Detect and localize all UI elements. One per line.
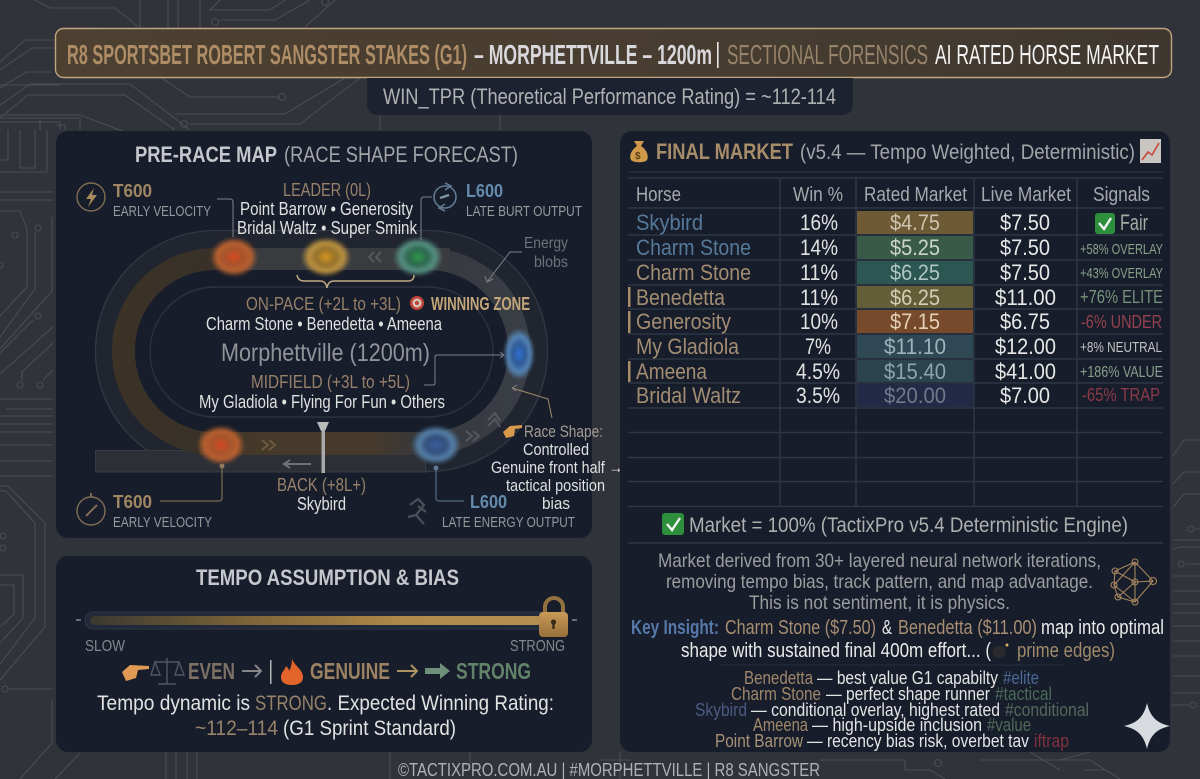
table header row: Horse bbox=[636, 184, 681, 206]
table: market bbox=[628, 172, 1163, 506]
key insight: & bbox=[882, 617, 892, 639]
row: Generosity: -6% UNDER bbox=[1081, 312, 1162, 332]
row: Generosity: $7.15 bbox=[890, 309, 940, 334]
key insight bbox=[631, 617, 1164, 662]
methodology paragraph: Market derived from 30+ layered neural network iterations, bbox=[658, 550, 1101, 572]
midfield label: My Gladiola • Flying For Fun • Others bbox=[199, 392, 445, 412]
row: Benedetta: $6.25 bbox=[890, 285, 940, 310]
icon: sparkle star bbox=[1124, 703, 1170, 749]
energy blobs label: Energy bbox=[524, 235, 568, 252]
tempo summary: ~112–114 bbox=[195, 717, 278, 740]
row: Benedetta bbox=[628, 285, 1163, 310]
horse notes: Benedetta bbox=[744, 668, 814, 688]
icon: chart bbox=[1140, 139, 1161, 163]
horse notes: Charm Stone bbox=[731, 684, 821, 704]
row: Skybird: 16% bbox=[800, 210, 838, 235]
key insight: Benedetta ($11.00) bbox=[898, 617, 1037, 639]
race shape note: bias bbox=[542, 494, 570, 513]
market total line: Market = 100% (TactixPro v5.4 Deterministic Engine) bbox=[689, 514, 1128, 537]
tempo heading: TEMPO ASSUMPTION & BIAS bbox=[196, 565, 459, 590]
key insight: prime edges) bbox=[1017, 640, 1115, 662]
row: Generosity: $6.75 bbox=[1000, 309, 1050, 334]
slider labels bbox=[85, 638, 565, 655]
row: Skybird: $4.75 bbox=[890, 210, 940, 235]
final market heading: (v5.4 — Tempo Weighted, Deterministic) bbox=[800, 141, 1135, 164]
table header row: Rated Market bbox=[864, 184, 967, 206]
title: separator bbox=[717, 42, 719, 68]
pre-race map heading bbox=[135, 142, 518, 167]
icon: fire bbox=[281, 658, 303, 685]
row: Charm Stone 11%: $7.50 bbox=[1000, 260, 1050, 285]
title: sectional forensics: SECTIONAL FORENSICS bbox=[727, 39, 928, 70]
horse notes: #conditional bbox=[1005, 700, 1089, 720]
rated market cell colours bbox=[857, 211, 973, 407]
row: Charm Stone 14%: $7.50 bbox=[1000, 235, 1050, 260]
on-pace label bbox=[206, 294, 530, 334]
final market heading: FINAL MARKET bbox=[656, 139, 793, 164]
icon: money bag: $ bbox=[635, 151, 641, 162]
pre-race map heading: PRE-RACE MAP bbox=[135, 142, 277, 167]
row: Benedetta: Benedetta bbox=[636, 285, 726, 310]
start post marker bbox=[317, 422, 329, 473]
track name: Morphettville (1200m) bbox=[221, 339, 430, 367]
horse notes: — conditional overlay, highest rated bbox=[751, 700, 1000, 720]
row: My Gladiola: 7% bbox=[805, 334, 831, 359]
race shape note: tactical position bbox=[506, 476, 605, 495]
leader label bbox=[237, 180, 418, 238]
icon: L600 bottom runner bbox=[408, 499, 426, 524]
row: Bridal Waltz: $20.00 bbox=[884, 383, 946, 408]
key insight: Charm Stone ($7.50) bbox=[725, 617, 876, 639]
row: My Gladiola: $12.00 bbox=[995, 334, 1056, 359]
row: Charm Stone 14%: +58% OVERLAY bbox=[1080, 241, 1163, 258]
tempo summary: (G1 Sprint Standard) bbox=[283, 717, 456, 740]
table header row: Signals bbox=[1093, 184, 1150, 206]
icon: T600 bottom stopwatch bbox=[77, 493, 105, 525]
row: Charm Stone 11% bbox=[636, 260, 1163, 285]
race shape note: Genuine front half → bbox=[491, 458, 623, 477]
row: My Gladiola: +8% NEUTRAL bbox=[1080, 339, 1162, 356]
connector lines bbox=[160, 197, 552, 501]
icon: L600 top cycle bbox=[434, 183, 456, 211]
energy blobs label: blobs bbox=[534, 254, 568, 271]
leader label: Point Barrow • Generosity bbox=[240, 199, 413, 219]
row: Skybird: Fair bbox=[1120, 210, 1148, 235]
row: Generosity bbox=[628, 309, 1162, 334]
icon: bomb bbox=[992, 644, 1008, 658]
icon: green arrow bbox=[425, 663, 450, 679]
tempo summary: Tempo dynamic is bbox=[97, 692, 250, 715]
horse notes: — high-upside inclusion bbox=[812, 715, 982, 735]
row: Ameena bbox=[628, 359, 1163, 384]
tempo summary: STRONG bbox=[255, 692, 327, 715]
T600 top label: EARLY VELOCITY bbox=[113, 203, 211, 220]
icon: pointing hand bbox=[122, 665, 149, 681]
methodology paragraph: This is not sentiment, it is physics. bbox=[749, 592, 1010, 614]
energy blobs label bbox=[524, 235, 568, 271]
row: Generosity: 10% bbox=[800, 309, 838, 334]
title: race name: R8 SPORTSBET ROBERT SANGSTER STAKES (G1) bbox=[67, 39, 467, 70]
track chevrons bbox=[262, 252, 500, 468]
methodology paragraph bbox=[658, 550, 1101, 614]
row: Bridal Waltz: 3.5% bbox=[796, 383, 840, 408]
icon: T600 top lightning bbox=[77, 183, 105, 211]
T600 bottom label: T600 bbox=[113, 492, 152, 512]
T600 top label: T600 bbox=[113, 181, 152, 201]
row: Charm Stone 11%: 11% bbox=[800, 260, 838, 285]
row: Generosity: Generosity bbox=[636, 309, 731, 334]
arrow: genuine to strong bbox=[397, 665, 417, 677]
icon: pointing hand bbox=[503, 425, 522, 438]
race shape note: Race Shape: bbox=[524, 422, 603, 441]
race shape note: Controlled bbox=[523, 440, 589, 459]
row: Charm Stone 11%: Charm Stone bbox=[636, 260, 751, 285]
header banner bbox=[56, 28, 1172, 78]
panel: pre-race map bbox=[56, 131, 623, 538]
row: Charm Stone 14%: 14% bbox=[800, 235, 838, 260]
L600 bottom label bbox=[442, 492, 575, 531]
tempo progression: EVEN bbox=[188, 658, 235, 684]
L600 top label: LATE BURT OUTPUT bbox=[466, 203, 582, 220]
row: Charm Stone 11%: +43% OVERLAY bbox=[1080, 265, 1163, 282]
row: Benedetta: 11% bbox=[800, 285, 838, 310]
slider labels: STRONG bbox=[510, 638, 565, 655]
key insight: map into optimal bbox=[1041, 617, 1164, 639]
row: Bridal Waltz: Bridal Waltz bbox=[636, 383, 741, 408]
table header row: Live Market bbox=[981, 184, 1071, 206]
icon: neural network bbox=[1111, 559, 1156, 605]
back label bbox=[277, 475, 366, 514]
horse notes: #elite bbox=[1003, 668, 1039, 688]
row: Bridal Waltz bbox=[636, 383, 1160, 408]
panel: tempo assumption and bias bbox=[56, 556, 592, 752]
L600 top label: L600 bbox=[466, 181, 503, 201]
leader label: Bridal Waltz • Super Smink bbox=[237, 218, 418, 238]
horse notes bbox=[695, 668, 1089, 751]
leader label: LEADER (0L) bbox=[283, 180, 371, 200]
horse notes: — best value G1 capabilty bbox=[817, 668, 998, 688]
horse notes: #tactical bbox=[995, 684, 1052, 704]
T600 bottom label: EARLY VELOCITY bbox=[113, 514, 212, 531]
on-pace label: ON-PACE (+2L to +3L) bbox=[246, 294, 401, 314]
energy blobs bbox=[197, 237, 535, 465]
row: My Gladiola: $11.10 bbox=[884, 334, 946, 359]
midfield label: MIDFIELD (+3L to +5L) bbox=[251, 372, 410, 392]
row: Bridal Waltz: -65% TRAP bbox=[1082, 385, 1160, 405]
row: Charm Stone 11%: $6.25 bbox=[890, 260, 940, 285]
L600 bottom label: LATE ENERGY OUTPUT bbox=[442, 514, 575, 531]
row: Skybird: $7.50 bbox=[1000, 210, 1050, 235]
row: Charm Stone 14%: $5.25 bbox=[890, 235, 940, 260]
back label: BACK (+8L+) bbox=[277, 475, 366, 495]
row: Skybird: Skybird bbox=[636, 210, 703, 235]
final market heading bbox=[656, 139, 1135, 164]
tempo progression: STRONG bbox=[456, 658, 531, 684]
race shape note bbox=[491, 422, 623, 513]
row: Ameena: 4.5% bbox=[796, 359, 840, 384]
row: Charm Stone 14%: Charm Stone bbox=[636, 235, 751, 260]
methodology paragraph: removing tempo bias, track pattern, and map advantage. bbox=[666, 571, 1093, 593]
on-pace label: Charm Stone • Benedetta • Ameena bbox=[206, 314, 443, 334]
market total line bbox=[628, 513, 1163, 543]
horse notes: — recency bias risk, overbet tav bbox=[807, 731, 1029, 751]
icon: lock bbox=[539, 598, 568, 637]
on-pace label: WINNING ZONE bbox=[431, 294, 530, 314]
row: Bridal Waltz: $7.00 bbox=[1000, 383, 1050, 408]
brace: leader group bbox=[297, 275, 414, 288]
title: venue: – MORPHETTVILLE – 1200m bbox=[474, 39, 712, 70]
arrow: even to genuine bbox=[242, 665, 261, 677]
table header row bbox=[636, 184, 1150, 206]
pre-race map heading: (RACE SHAPE FORECAST) bbox=[284, 142, 518, 167]
icon: money bag bbox=[630, 141, 648, 162]
slider labels: SLOW bbox=[85, 638, 126, 655]
horse notes: — perfect shape runner bbox=[826, 684, 990, 704]
icon: check box bbox=[662, 513, 684, 535]
race track oval bbox=[96, 230, 548, 472]
midfield label bbox=[199, 372, 445, 412]
table header row: Win % bbox=[793, 184, 843, 206]
row: Ameena: $41.00 bbox=[995, 359, 1056, 384]
icon: scales bbox=[151, 658, 184, 684]
row: My Gladiola: My Gladiola bbox=[636, 334, 740, 359]
back label: Skybird bbox=[297, 494, 346, 514]
tempo summary: . Expected Winning Rating: bbox=[327, 692, 554, 715]
row: Ameena: +186% VALUE bbox=[1080, 364, 1163, 381]
tempo progression: GENUINE bbox=[310, 658, 390, 684]
key insight: Key Insight: bbox=[631, 617, 719, 639]
L600 bottom label: L600 bbox=[470, 492, 507, 512]
tempo progression bbox=[122, 658, 531, 685]
row: Skybird bbox=[636, 210, 1148, 235]
row: Benedetta: +76% ELITE bbox=[1080, 287, 1163, 307]
key insight: shape with sustained final 400m effort... ( bbox=[681, 640, 991, 662]
horse notes: Skybird bbox=[695, 700, 747, 720]
icon: target bbox=[410, 296, 424, 310]
T600 bottom label bbox=[113, 492, 212, 531]
tempo slider bbox=[76, 598, 577, 637]
L600 top label bbox=[466, 181, 582, 220]
horse notes: iftrap bbox=[1034, 731, 1069, 751]
horse notes: Ameena bbox=[753, 715, 809, 735]
row: Charm Stone 14% bbox=[636, 235, 1163, 260]
row: Ameena: $15.40 bbox=[884, 359, 946, 384]
subtitle text: WIN_TPR (Theoretical Performance Rating) = ~112-114 bbox=[383, 84, 836, 109]
row: My Gladiola bbox=[636, 334, 1162, 359]
panel: final market bbox=[620, 131, 1170, 752]
T600 top label bbox=[113, 181, 211, 220]
row: Benedetta: $11.00 bbox=[995, 285, 1056, 310]
horse notes: Point Barrow bbox=[715, 731, 804, 751]
tempo summary bbox=[97, 692, 554, 740]
subtitle tab bbox=[367, 78, 853, 115]
row: Ameena: Ameena bbox=[636, 359, 708, 384]
horse notes: #value bbox=[987, 715, 1031, 735]
